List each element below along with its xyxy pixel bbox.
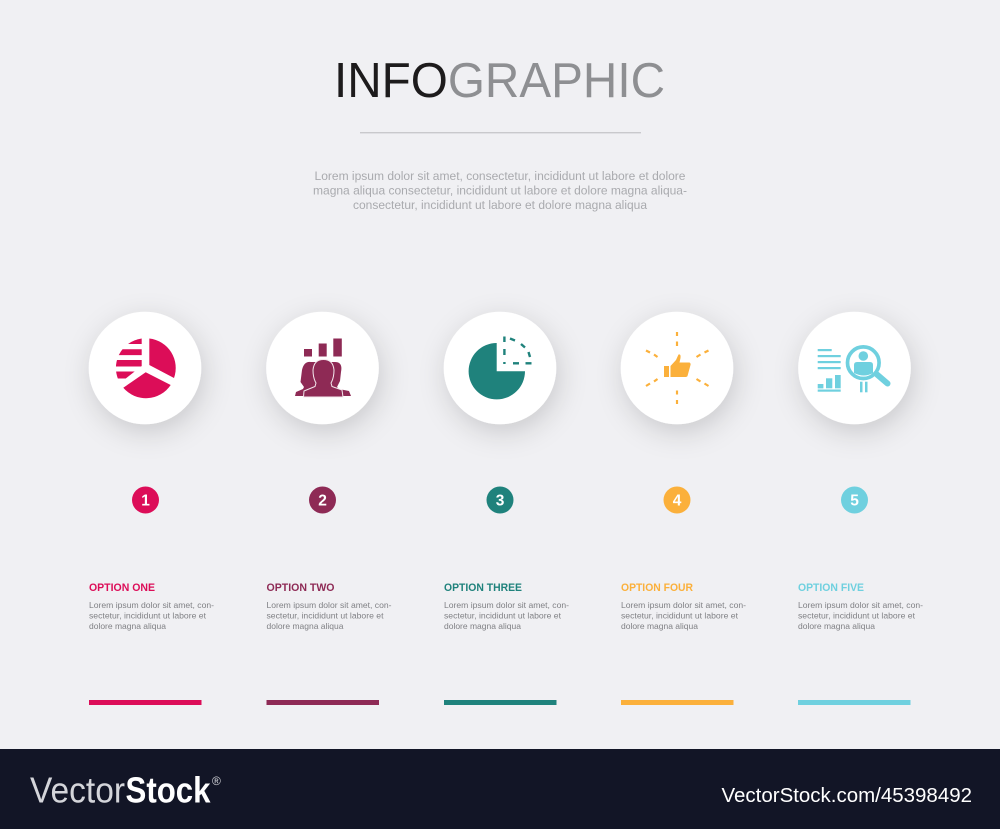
- option three text: sectetur, incididunt ut labore et: [444, 610, 562, 620]
- registered mark: ®: [212, 774, 221, 788]
- panel: option two: [266, 312, 392, 705]
- circle one: [89, 312, 201, 424]
- option four text: OPTION FOUR: [621, 582, 693, 594]
- option five text: Lorem ipsum dolor sit amet, con-: [798, 600, 923, 610]
- number badge 5: 5: [850, 492, 859, 510]
- option two text: Lorem ipsum dolor sit amet, con-: [266, 600, 392, 610]
- option four text: Lorem ipsum dolor sit amet, con-: [621, 600, 746, 610]
- option two text: OPTION TWO: [266, 582, 334, 594]
- number badge 3: [486, 486, 514, 514]
- number badge 3: 3: [496, 492, 505, 510]
- option four text: dolore magna aliqua: [621, 621, 698, 631]
- option four text: sectetur, incididunt ut labore et: [621, 610, 739, 620]
- intro text: consectetur, incididunt ut labore et dolore magna aliqua: [353, 198, 647, 212]
- icon: people with bars: [295, 338, 351, 397]
- icon: thumbs up with rays: [646, 332, 708, 404]
- footer image id: VectorStock.com/45398492: [722, 785, 972, 807]
- option one text: Lorem ipsum dolor sit amet, con-: [89, 600, 214, 610]
- number badge 4: 4: [673, 492, 682, 510]
- option three text: dolore magna aliqua: [444, 621, 521, 631]
- option five text: dolore magna aliqua: [798, 621, 875, 631]
- option three text: OPTION THREE: [444, 582, 522, 594]
- option five text: sectetur, incididunt ut labore et: [798, 610, 916, 620]
- number badge 2: [309, 486, 336, 514]
- title: INFOGRAPHIC: [334, 54, 665, 108]
- intro text: Lorem ipsum dolor sit amet, consectetur, incididunt ut labore et dolore: [314, 169, 686, 183]
- intro text: magna aliqua consectetur, incididunt ut labore et dolore magna aliqua-: [313, 184, 687, 198]
- option two text: sectetur, incididunt ut labore et: [266, 610, 384, 620]
- option one text: dolore magna aliqua: [89, 621, 166, 631]
- option two text: dolore magna aliqua: [266, 621, 344, 631]
- bar one: [89, 700, 202, 705]
- footer logo: [30, 770, 211, 810]
- option three text: [444, 582, 569, 631]
- panel: option five: [798, 312, 923, 705]
- option five text: [798, 582, 923, 631]
- panel: option three: [444, 312, 569, 705]
- option four text: [621, 582, 746, 631]
- footer band: [0, 749, 1000, 829]
- circle three: [444, 312, 556, 424]
- circle four: [621, 312, 733, 424]
- bar five: [798, 700, 910, 705]
- option one text: OPTION ONE: [89, 582, 155, 594]
- icon: magnifier over person with report: [818, 347, 888, 392]
- intro text: [313, 169, 687, 212]
- option one text: [89, 582, 214, 631]
- panel: option one: [89, 312, 214, 705]
- footer logo: Vector: [30, 770, 125, 810]
- number badge 5: [841, 486, 868, 514]
- number badge 4: [664, 486, 690, 514]
- option one text: sectetur, incididunt ut labore et: [89, 610, 207, 620]
- bar four: [621, 700, 734, 705]
- icon: striped pie chart: [116, 338, 176, 398]
- circle two: [266, 312, 379, 424]
- option two text: [266, 582, 392, 631]
- number badge 2: 2: [318, 492, 327, 510]
- number badge 1: [132, 486, 159, 514]
- option five text: OPTION FIVE: [798, 582, 864, 594]
- option three text: Lorem ipsum dolor sit amet, con-: [444, 600, 569, 610]
- footer logo: Stock: [126, 770, 211, 810]
- bar three: [444, 700, 556, 705]
- bar two: [266, 700, 379, 705]
- icon: pie with dashed quarter: [469, 336, 532, 399]
- panel: option four: [621, 312, 746, 705]
- circle five: [798, 312, 911, 424]
- number badge 1: 1: [141, 492, 150, 510]
